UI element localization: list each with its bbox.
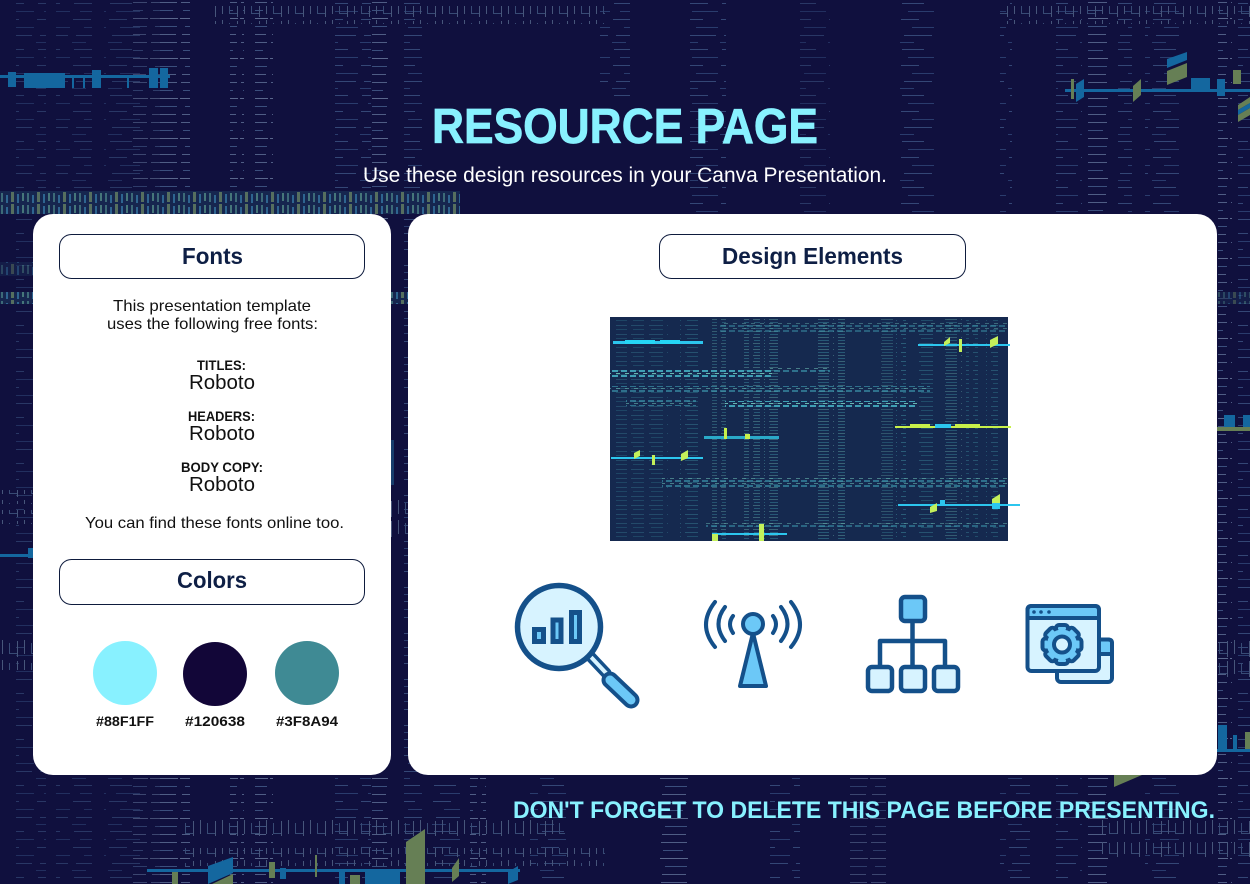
title: RESOURCE PAGE [432, 100, 818, 154]
heading: colors: Colors [177, 567, 247, 593]
text block: font note: You can find these fonts online too. [85, 515, 344, 532]
footer reminder: DON'T FORGET TO DELETE THIS PAGE BEFORE PRESENTING. [513, 797, 1215, 824]
panel: fonts and colors [33, 214, 391, 775]
text block: headers font: Roboto [189, 423, 255, 445]
color swatch: light cyan: #88F1FF [96, 713, 154, 729]
background trace: top left [0, 68, 170, 88]
text block: font intro [107, 298, 318, 333]
color swatch: dark navy: #120638 [185, 713, 245, 729]
text block: titles font: Roboto [189, 372, 255, 394]
heading: design elements [660, 234, 966, 278]
text block: body copy font: Roboto [189, 474, 255, 496]
icon: antenna tower [706, 602, 800, 686]
icon: organisation hierarchy [868, 597, 958, 691]
pattern sample image [610, 317, 1020, 541]
icon: magnifier with bar chart [518, 586, 631, 700]
color swatch: teal: #3F8A94 [276, 713, 338, 729]
background trace: top right [1065, 52, 1250, 122]
heading: fonts: Fonts [182, 243, 243, 269]
background trace: bottom [147, 829, 520, 884]
text block: headers font: HEADERS: [188, 408, 255, 424]
panel: design elements [408, 214, 1217, 775]
heading: design elements: Design Elements [722, 243, 903, 269]
color swatch: teal [275, 641, 339, 729]
background trace: side edges [0, 415, 1250, 787]
text block: titles font: TITLES: [197, 357, 246, 373]
text block: headers font [188, 408, 255, 445]
subtitle: Use these design resources in your Canva Presentation. [363, 164, 887, 187]
text block: font intro: uses the following free fonts: [107, 316, 318, 333]
text block: body copy font [181, 459, 263, 496]
icon: settings window [1028, 606, 1112, 682]
heading: fonts [60, 234, 364, 278]
text block: body copy font: BODY COPY: [181, 459, 263, 475]
color swatch: dark navy [183, 642, 247, 729]
color swatch: light cyan [93, 641, 157, 729]
text block: font intro: This presentation template [113, 298, 311, 315]
text block: titles font [189, 357, 255, 394]
heading: colors [60, 560, 364, 604]
